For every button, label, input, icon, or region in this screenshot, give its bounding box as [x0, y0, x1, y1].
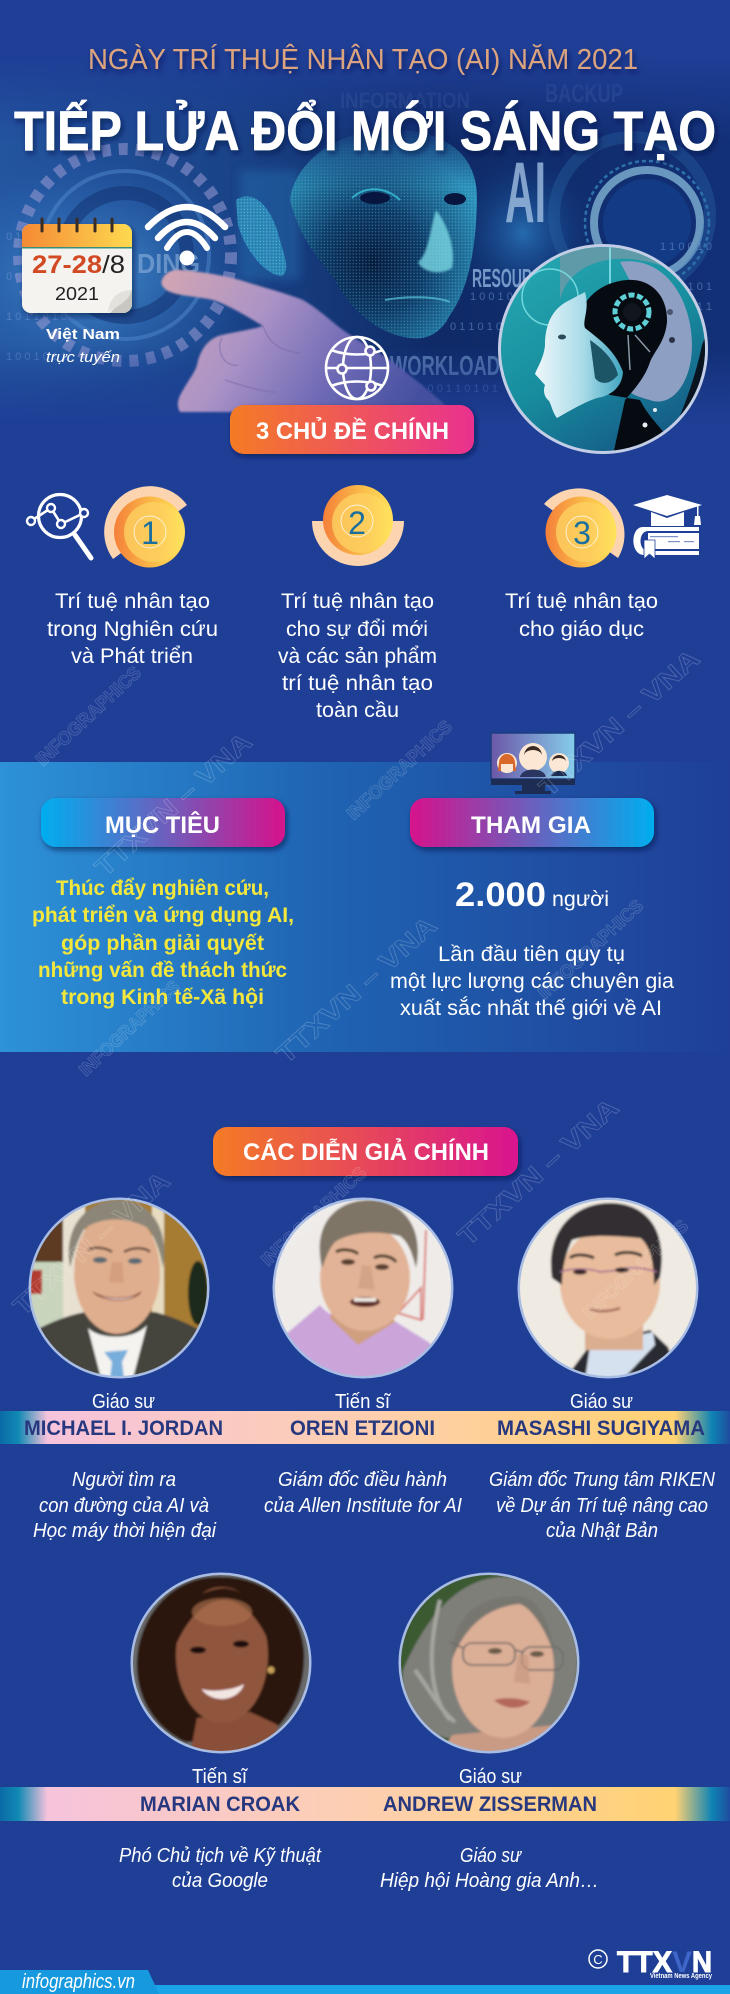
participation text: xuất sắc nhất thế giới về AI: [400, 997, 662, 1020]
speaker description: Zisserman: Hiệp hội Hoàng gia Anh…: [380, 1870, 599, 1892]
watermarks: TTXVN – VNA: [89, 726, 258, 882]
event location: Việt Nam: [46, 326, 120, 343]
participation text: [390, 943, 674, 1020]
ribbon with speaker names row 1: [0, 1411, 730, 1444]
goals text: phát triển và ứng dụng AI,: [32, 904, 294, 927]
participant count: người: [552, 888, 609, 911]
watermarks: INFOGRAPHICS: [32, 663, 145, 770]
calendar: event date: 2021: [55, 284, 99, 304]
background: binary digits: 1 0 1 0 0 1 1 0 1 0 1: [400, 383, 498, 395]
topic 2 text: [278, 590, 437, 722]
topic medal 3: [544, 488, 624, 568]
speaker description: Etzioni: Giám đốc điều hành: [278, 1469, 447, 1491]
copyright and TTXVN logo: Vietnam News Agency: [650, 1973, 712, 1980]
speaker titles row 1: Giáo sư: [92, 1391, 155, 1413]
portrait: Masashi Sugiyama: [516, 1195, 700, 1380]
header background image: [0, 72, 730, 409]
speaker description: Croak: [119, 1845, 322, 1892]
topic 3 text: Trí tuệ nhân tạo: [505, 590, 658, 613]
speaker titles row 2: Giáo sư: [459, 1766, 522, 1788]
background: tech words: AI: [505, 145, 546, 241]
background: tech words: DING: [137, 248, 200, 279]
robot portrait circle: [495, 240, 715, 460]
background: binary digits: [6, 231, 712, 395]
topic 1 text: và Phát triển: [71, 645, 193, 668]
goals text: Thúc đẩy nghiên cứu,: [56, 877, 269, 900]
topic 2 text: toàn cầu: [316, 699, 399, 722]
copyright and TTXVN logo: V: [672, 1946, 692, 1979]
pill heading: participation: [410, 798, 654, 847]
hand illustration: [161, 270, 450, 412]
background: binary digits: 0 1 1 0 1 0 1 0 0 1 0 1 1 1: [450, 321, 575, 333]
background: tech words: BACKUP: [545, 78, 623, 108]
event location: trực tuyến: [46, 349, 120, 366]
background: binary digits: 1 0 0 1 0 1 1 0 0 1 1 0 1 0: [470, 291, 595, 303]
ribbon with speaker names row 1: MASASHI SUGIYAMA: [497, 1417, 705, 1440]
topic 2 text: cho sự đổi mới: [286, 618, 428, 641]
watermarks: TTXVN – VNA: [533, 643, 706, 802]
background: tech words: WORKLOAD: [390, 350, 500, 381]
watermarks: INFOGRAPHICS: [343, 717, 456, 824]
watermarks: INFOGRAPHICS: [75, 977, 184, 1080]
ribbon with speaker names row 2: [0, 1787, 730, 1821]
speaker description: Croak: của Google: [172, 1870, 268, 1892]
background: dotted face: [236, 125, 485, 345]
icon: globe: [326, 337, 388, 399]
copyright and TTXVN logo: N: [692, 1946, 712, 1979]
speaker titles row 1: [92, 1391, 633, 1413]
subtitle: NGÀY TRÍ THUỆ NHÂN TẠO (AI) NĂM 2021: [88, 43, 638, 76]
background: tech words: RESOUR: [472, 263, 532, 293]
ribbon with speaker names row 2: MARIAN CROAK: [140, 1793, 300, 1816]
goals text: [32, 877, 294, 1009]
speaker titles row 1: Giáo sư: [570, 1391, 633, 1413]
topic medal 2: 2: [348, 505, 366, 541]
speaker description: Jordan: con đường của AI và: [39, 1495, 209, 1517]
speaker description: Zisserman: Giáo sư: [460, 1845, 522, 1867]
speaker description: Zisserman: [380, 1845, 599, 1892]
speaker description: Jordan: Học máy thời hiện đại: [33, 1520, 217, 1542]
background: binary digits: 1 0 1 1 0 1 0: [6, 311, 67, 323]
watermarks: TTXVN – VNA: [270, 910, 443, 1069]
topic medal 1: [104, 486, 187, 568]
background: left gear rings: [19, 149, 231, 361]
topic medal 3: 3: [573, 515, 591, 551]
event location: [46, 326, 120, 366]
pill heading: 3 main topics: 3 CHỦ ĐỀ CHÍNH: [256, 416, 449, 445]
topic medal 1: 1: [141, 515, 159, 551]
participant count: [455, 876, 609, 914]
ribbon with speaker names row 1: MICHAEL I. JORDAN: [24, 1417, 223, 1440]
pill heading: goals: MỤC TIÊU: [105, 811, 220, 839]
background: binary digits: 0 1 0 1 1 0: [6, 231, 58, 243]
goals text: góp phần giải quyết: [61, 932, 264, 955]
watermarks: INFOGRAPHICS: [579, 1216, 692, 1323]
watermarks: INFOGRAPHICS: [534, 896, 647, 1003]
topic medal 2: [312, 485, 404, 566]
copyright and TTXVN logo: TTX: [617, 1946, 672, 1979]
speaker titles row 1: Tiến sĩ: [335, 1391, 391, 1413]
topic 2 text: trí tuệ nhân tạo: [282, 672, 433, 695]
goals text: trong Kinh tế-Xã hội: [61, 986, 264, 1009]
speaker description: Sugiyama: của Nhật Bản: [546, 1520, 658, 1542]
watermarks: TTXVN – VNA: [452, 1092, 625, 1251]
icon: video conference monitor: [491, 733, 575, 794]
speaker description: Sugiyama: về Dự án Trí tuệ nâng cao: [496, 1495, 708, 1517]
topic 2 text: và các sản phẩm: [278, 645, 437, 668]
background: binary digits: 0 0 1 0 0 1: [6, 271, 58, 283]
background: binary digits: 1 1 0 0 1 0: [660, 241, 712, 253]
pill heading: participation: THAM GIA: [471, 812, 591, 839]
background: binary digits: 1 0 1 1 0 1: [660, 281, 712, 293]
pill heading: 3 main topics: [230, 405, 474, 454]
footer bar with site name: [0, 1970, 730, 1994]
icon: wifi: [148, 207, 225, 266]
speaker description: Sugiyama: Giám đốc Trung tâm RIKEN: [489, 1469, 716, 1491]
footer bar with site name: infographics.vn: [22, 1971, 135, 1993]
participation text: một lực lượng các chuyên gia: [390, 970, 674, 993]
watermarks: TTXVN – VNA: [7, 1165, 176, 1321]
topic 3 text: [505, 590, 658, 641]
speaker titles row 2: [192, 1766, 522, 1788]
speaker description: Jordan: [33, 1469, 217, 1542]
pill heading: main speakers: CÁC DIỄN GIẢ CHÍNH: [243, 1137, 489, 1166]
background: right rings: [554, 137, 710, 293]
topic 1 text: [47, 590, 218, 668]
speaker description: Etzioni: [264, 1469, 462, 1517]
background: tech words: INFORMATION: [340, 88, 470, 113]
background: tech words: [137, 78, 623, 381]
icon: graduation cap on books: [633, 495, 702, 559]
calendar: event date: 27-28/8: [32, 251, 125, 279]
portrait: Marian Croak: [129, 1570, 313, 1755]
portrait: Oren Etzioni: [272, 1195, 456, 1380]
participant count: 2.000: [455, 876, 546, 914]
ribbon with speaker names row 1: OREN ETZIONI: [290, 1417, 435, 1440]
ribbon with speaker names row 2: ANDREW ZISSERMAN: [383, 1793, 597, 1816]
portrait: Michael I. Jordan: [28, 1195, 212, 1380]
watermarks: [7, 643, 706, 1323]
speaker description: Sugiyama: [489, 1469, 716, 1542]
speaker description: Jordan: Người tìm ra: [72, 1469, 176, 1491]
topic 1 text: trong Nghiên cứu: [47, 618, 218, 641]
watermarks: INFOGRAPHICS: [257, 1163, 370, 1270]
pill heading: goals: [41, 798, 285, 847]
speaker description: Croak: Phó Chủ tịch về Kỹ thuật: [119, 1845, 322, 1867]
topic 2 text: Trí tuệ nhân tạo: [281, 590, 434, 613]
panel: goals and participation band: [0, 762, 730, 1052]
copyright and TTXVN logo: C: [593, 1952, 603, 1967]
background: binary digits: 0 0 1 0 1 1: [660, 301, 712, 313]
calendar: event date: [22, 219, 132, 313]
portrait: Andrew Zisserman: [398, 1570, 582, 1755]
goals text: những vấn đề thách thức: [38, 959, 287, 982]
topic 1 text: Trí tuệ nhân tạo: [55, 590, 210, 613]
participation text: Lần đầu tiên quy tụ: [438, 943, 625, 966]
speaker titles row 2: Tiến sĩ: [192, 1766, 248, 1788]
pill heading: main speakers: [213, 1127, 518, 1176]
topic 3 text: cho giáo dục: [519, 618, 644, 641]
copyright and TTXVN logo: [589, 1946, 712, 1980]
icon: magnifier chart: [27, 494, 91, 558]
background: binary digits: 1 0 0 1 0 1 1: [6, 351, 67, 363]
speaker description: Etzioni: của Allen Institute for AI: [264, 1495, 462, 1517]
